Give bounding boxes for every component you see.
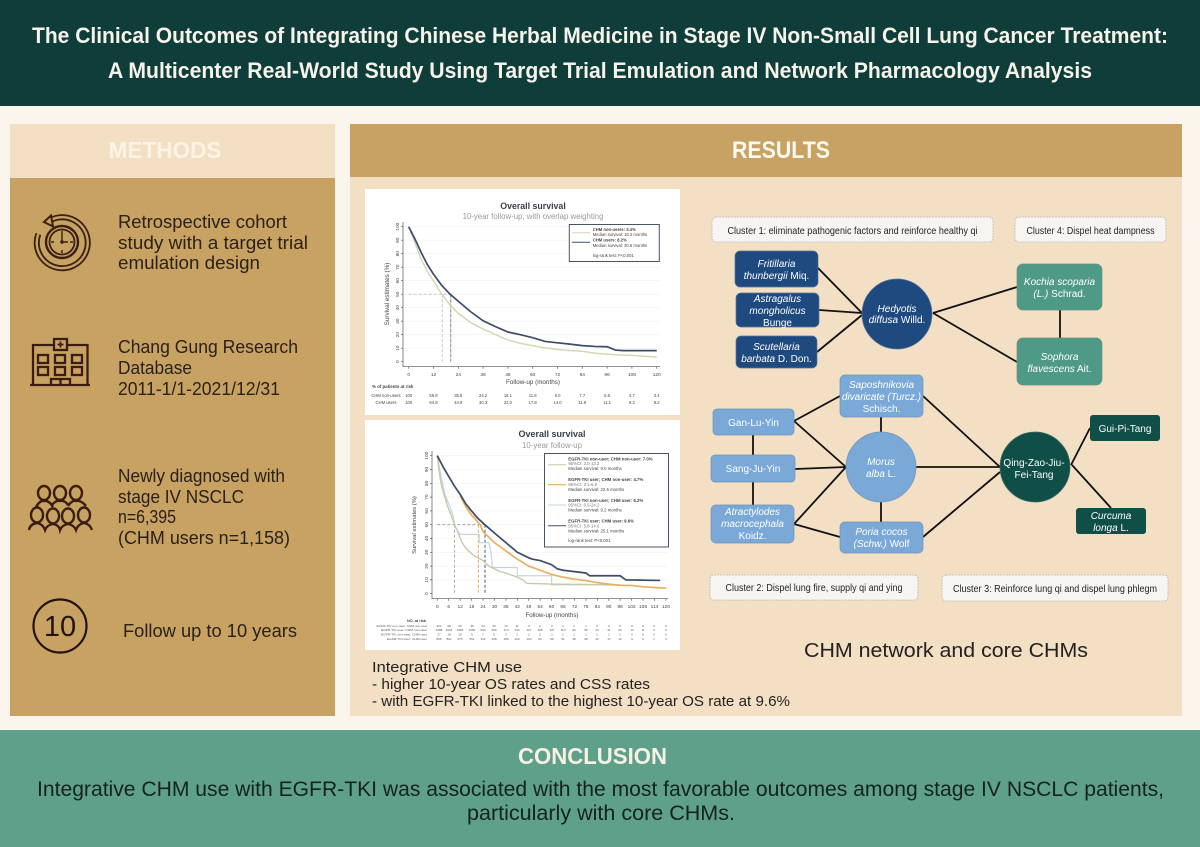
node: Fritillaria: Fritillaria (758, 259, 796, 270)
node: Atractylodes (711, 505, 794, 543)
label: cluster 3: Cluster 3: Reinforce lung qi and dispel lung phlegm (953, 583, 1157, 595)
chart: overall survival with overlap weighting: 3.4 (654, 393, 660, 398)
chart: overall survival by EGFR-TKI and CHM use: 1 (562, 624, 564, 628)
node: Astragalus: mongholicus (749, 306, 806, 317)
chart: overall survival by EGFR-TKI and CHM use: 95%CI: 3.1-6.9 (568, 482, 598, 487)
chart: overall survival by EGFR-TKI and CHM use: 2288 (436, 628, 443, 632)
chart: overall survival by EGFR-TKI and CHM use: 13 (504, 624, 508, 628)
chart: overall survival with overlap weighting: 10-year follow-up, with overlap weighting (463, 212, 603, 221)
chart: overall survival by EGFR-TKI and CHM use: 58 (584, 628, 588, 632)
chart: overall survival with overlap weighting: 80 (395, 251, 401, 256)
text: conclusion statement: particularly with core CHMs. (467, 801, 735, 825)
chart: overall survival by EGFR-TKI and CHM use: 0 (631, 624, 633, 628)
node: Sophora flavescens: flavescens Ait. (1028, 364, 1091, 375)
chart: overall survival by EGFR-TKI and CHM use: 18 (469, 604, 475, 610)
chart: overall survival by EGFR-TKI and CHM use: 0 (665, 624, 667, 628)
chart: overall survival with overlap weighting: 20 (395, 332, 401, 337)
caption: CHM network: CHM network and core CHMs (804, 639, 1088, 662)
chart: overall survival by EGFR-TKI and CHM use: 98 (447, 624, 451, 628)
title banner (0, 0, 1200, 106)
chart: overall survival by EGFR-TKI and CHM use: 10 (424, 577, 430, 583)
chart: overall survival by EGFR-TKI and CHM use: 669 (491, 628, 497, 632)
chart: overall survival by EGFR-TKI and CHM use: 2 (551, 632, 553, 636)
chart: overall survival by EGFR-TKI and CHM use: 95%CI: 0.5-24.2 (568, 502, 600, 508)
chart: overall survival by EGFR-TKI and CHM use: 1 (596, 632, 598, 636)
chart: overall survival by EGFR-TKI and CHM use: 0 (665, 632, 667, 636)
label: cluster 2: Cluster 2: Dispel lung fire, supply qi and ying (726, 582, 903, 594)
chart: overall survival by EGFR-TKI and CHM use: Follow-up (months) (526, 612, 578, 619)
heading: methods: METHODS (108, 137, 222, 163)
label: cluster 3 (942, 575, 1168, 601)
chart: overall survival by EGFR-TKI and CHM use: 95%CI: 5.8-14.6 (568, 524, 600, 528)
chart: overall survival by EGFR-TKI and CHM use: 51 (561, 637, 565, 641)
chart: overall survival by EGFR-TKI and CHM use: EGFR-TKI user; CHM user: 9.6% (568, 518, 634, 524)
chart: overall survival with overlap weighting: 12 (431, 372, 436, 378)
chart: overall survival by EGFR-TKI and CHM use: 6 (447, 604, 450, 610)
node: Sang-Ju-Yin (711, 455, 795, 482)
chart: overall survival by EGFR-TKI and CHM use: 110 (561, 628, 566, 632)
chart: overall survival with overlap weighting: 100 (405, 393, 413, 398)
chart: overall survival by EGFR-TKI and CHM use: 2 (539, 624, 541, 628)
chart: overall survival by EGFR-TKI and CHM use: 0 (653, 624, 655, 628)
chart: overall survival by EGFR-TKI and CHM use: 36 (503, 604, 509, 610)
chart: overall survival with overlap weighting: 48 (505, 372, 511, 378)
chart: overall survival with overlap weighting: 9.0 (555, 393, 561, 398)
chart: overall survival by EGFR-TKI and CHM use: 54 (538, 604, 543, 610)
text: database (118, 336, 298, 399)
chart: overall survival with overlap weighting: 11.1 (603, 400, 612, 405)
label: cluster 2 (710, 575, 918, 600)
chart: overall survival with overlap weighting: 84 (580, 372, 585, 378)
node: Morus alba (846, 432, 916, 502)
chart: overall survival with overlap weighting: 64.8 (429, 400, 438, 405)
chart: overall survival with overlap weighting (365, 189, 680, 415)
node: Saposhnikovia: Saposhnikovia (849, 380, 914, 391)
chart: overall survival by EGFR-TKI and CHM use: 188 (503, 637, 509, 641)
chart: overall survival with overlap weighting: 60 (395, 278, 401, 283)
title banner: The Clinical Outcomes of Integrating Chinese Herbal Medicine in Stage IV Non-Small Cell Lung Cancer Treatment: (32, 23, 1168, 48)
chart: overall survival by EGFR-TKI and CHM use: 60 (549, 604, 555, 610)
diagram: CHM network (710, 217, 1168, 601)
chart: overall survival with overlap weighting: 36 (480, 372, 486, 378)
chart: overall survival by EGFR-TKI and CHM use: 930 (480, 628, 486, 632)
chart: overall survival by EGFR-TKI and CHM use: EGFR-TKI non-user; CHM user (381, 632, 427, 636)
node: Scutellaria (736, 336, 817, 368)
chart: overall survival by EGFR-TKI and CHM use: 342 (480, 637, 486, 641)
chart: overall survival with overlap weighting: 72 (555, 372, 560, 378)
chart: overall survival by EGFR-TKI and CHM use: 2 (539, 632, 541, 636)
node: Poria cocos (840, 522, 923, 553)
chart: overall survival with overlap weighting: 22.0 (504, 400, 513, 405)
chart: overall survival by EGFR-TKI and CHM use: 100 (424, 451, 430, 460)
chart: overall survival with overlap weighting: 17.8 (529, 400, 537, 405)
chart: overall survival with overlap weighting: 90 (395, 237, 401, 243)
chart: overall survival by EGFR-TKI and CHM use: 238 (491, 637, 497, 641)
heading: conclusion: CONCLUSION (518, 743, 667, 769)
node: Astragalus: Astragalus (753, 294, 801, 305)
chart: overall survival by EGFR-TKI and CHM use: 84 (595, 604, 600, 610)
chart: overall survival by EGFR-TKI and CHM use: 1 (573, 624, 575, 628)
heading: results: RESULTS (732, 137, 830, 164)
chart: overall survival with overlap weighting: 100 (395, 222, 401, 231)
chart: overall survival with overlap weighting: 108 (628, 372, 636, 378)
node: Saposhnikovia: divaricate (Turcz.) (842, 392, 921, 403)
chart: overall survival with overlap weighting: 16.1 (504, 393, 513, 398)
icon: group of people (29, 486, 92, 530)
chart: overall survival by EGFR-TKI and CHM use: 44 (595, 628, 599, 632)
chart: overall survival by EGFR-TKI and CHM use: 20 (424, 563, 430, 569)
text: study design: study with a target trial (118, 232, 308, 253)
icon: hospital (30, 339, 90, 385)
chart: overall survival by EGFR-TKI and CHM use: 41 (607, 628, 611, 632)
label: cluster 1: Cluster 1: eliminate pathogenic factors and reinforce healthy qi (728, 225, 978, 237)
text: integrative CHM findings: - with EGFR-TKI linked to the highest 10-year OS rate at 9.6% (372, 694, 790, 710)
chart: overall survival by EGFR-TKI and CHM use: 0 (665, 637, 667, 641)
node: Scutellaria: Scutellaria (753, 342, 800, 353)
chart: overall survival by EGFR-TKI and CHM use: 40 (424, 536, 430, 541)
chart: overall survival by EGFR-TKI and CHM use: Median survival: 22.6 months (568, 487, 624, 492)
chart: overall survival by EGFR-TKI and CHM use: 0 (631, 632, 633, 636)
chart: overall survival by EGFR-TKI and CHM use (365, 420, 680, 650)
chart: overall survival by EGFR-TKI and CHM use: 60 (458, 624, 462, 628)
chart: overall survival by EGFR-TKI and CHM use: 27 (437, 632, 441, 636)
chart: overall survival by EGFR-TKI and CHM use: 2 (528, 632, 530, 636)
chart: overall survival with overlap weighting: 24 (456, 372, 461, 378)
chart: overall survival by EGFR-TKI and CHM use: 137 (549, 628, 555, 632)
chart: overall survival with overlap weighting: 35.8 (454, 393, 463, 398)
node: Hedyotis diffusa (862, 279, 932, 349)
chart: overall survival by EGFR-TKI and CHM use: Overall survival (518, 429, 586, 439)
text: database: 2011-1/1-2021/12/31 (118, 378, 280, 399)
node: Poria cocos: Poria cocos (855, 527, 908, 538)
text: integrative CHM findings: Integrative CHM use (372, 660, 522, 676)
text: follow up: Follow up to 10 years (123, 620, 297, 641)
chart: overall survival with overlap weighting: 10 (395, 345, 401, 351)
chart: overall survival by EGFR-TKI and CHM use: 13 (630, 628, 634, 632)
node: Poria cocos: (Schw.) Wolf (854, 539, 910, 550)
chart: overall survival by EGFR-TKI and CHM use: EGFR-TKI user; CHM non-user: 4.7% (568, 477, 643, 482)
chart: overall survival by EGFR-TKI and CHM use: 12 (618, 637, 622, 641)
chart: overall survival with overlap weighting: 44.8 (454, 400, 463, 405)
chart: overall survival by EGFR-TKI and CHM use: NO. at risk (407, 619, 427, 623)
chart: overall survival with overlap weighting: 5.6 (604, 393, 611, 398)
chart: overall survival by EGFR-TKI and CHM use: 70 (424, 494, 430, 500)
chart: overall survival by EGFR-TKI and CHM use: 1 (562, 632, 564, 636)
chart: overall survival by EGFR-TKI and CHM use: 90 (606, 604, 612, 610)
chart: overall survival by EGFR-TKI and CHM use: 90 (424, 467, 430, 472)
chart: overall survival with overlap weighting: log-rank test: P<0.001 (593, 253, 634, 258)
chart: overall survival with overlap weighting: 24.2 (479, 393, 488, 398)
chart: overall survival by EGFR-TKI and CHM use: 95%CI: 3.0-13.2 (568, 461, 600, 466)
chart: overall survival by EGFR-TKI and CHM use: Survival estimates (%) (412, 496, 418, 554)
chart: overall survival by EGFR-TKI and CHM use: 2 (551, 624, 553, 628)
chart: overall survival by EGFR-TKI and CHM use: EGFR-TKI user; CHM non-user (381, 628, 427, 632)
chart: overall survival by EGFR-TKI and CHM use: 188 (537, 628, 543, 632)
chart: overall survival by EGFR-TKI and CHM use: 20 (595, 637, 599, 641)
chart: overall survival by EGFR-TKI and CHM use: 3 (528, 624, 530, 628)
chart: overall survival by EGFR-TKI and CHM use: 0 (642, 632, 644, 636)
text: population: n=6,395 (118, 506, 176, 527)
chart: overall survival with overlap weighting: 0 (407, 372, 410, 378)
chart: overall survival with overlap weighting: Overall survival (500, 201, 566, 211)
chart: overall survival by EGFR-TKI and CHM use: 344 (514, 628, 520, 632)
chart: overall survival by EGFR-TKI and CHM use: 72 (572, 604, 577, 610)
node: Sophora flavescens: Sophora (1041, 352, 1079, 363)
node: Fritillaria: thunbergii Miq. (744, 271, 809, 282)
chart: overall survival with overlap weighting: 59.8 (429, 393, 438, 398)
chart: overall survival by EGFR-TKI and CHM use: 675 (457, 637, 463, 641)
chart: overall survival by EGFR-TKI and CHM use: 35 (470, 624, 474, 628)
chart: overall survival by EGFR-TKI and CHM use: 11 (641, 628, 645, 632)
chart: overall survival by EGFR-TKI and CHM use: 1282 (469, 628, 476, 632)
chart: overall survival by EGFR-TKI and CHM use: 1666 (457, 628, 464, 632)
chart: overall survival with overlap weighting: CHM non-users (371, 393, 401, 398)
node: Gui-Pi-Tang: Gui-Pi-Tang (1099, 424, 1151, 435)
panel: results (350, 124, 1182, 716)
chart: overall survival by EGFR-TKI and CHM use: 1 (653, 637, 655, 641)
chart: overall survival by EGFR-TKI and CHM use: 1 (619, 632, 621, 636)
chart: overall survival by EGFR-TKI and CHM use: 17 (607, 637, 611, 641)
chart: overall survival by EGFR-TKI and CHM use: 66 (560, 604, 566, 610)
node: Morus alba: alba L. (866, 469, 896, 480)
icon: number ten in circle: 10 (44, 611, 76, 643)
chart: overall survival with overlap weighting: 96 (604, 372, 610, 378)
node: Qing-Zao-Jiu-Fei-Tang: Fei-Tang (1015, 470, 1053, 481)
chart: overall survival by EGFR-TKI and CHM use: 6 (642, 637, 644, 641)
node: Kochia scoparia (1017, 264, 1102, 310)
text: study design: emulation design (118, 252, 260, 273)
node: Saposhnikovia (840, 375, 923, 417)
chart: overall survival with overlap weighting: 11.8 (529, 393, 537, 398)
node: Curcuma longa (1076, 508, 1146, 534)
chart: overall survival with overlap weighting: % of patients at risk (372, 384, 414, 389)
chart: overall survival by EGFR-TKI and CHM use: 96 (618, 604, 623, 610)
node: Atractylodes: Koidz. (739, 531, 766, 542)
chart: overall survival by EGFR-TKI and CHM use: 78 (583, 604, 589, 610)
chart: overall survival by EGFR-TKI and CHM use: 18 (447, 632, 451, 636)
text: database: Database (118, 357, 192, 378)
chart: overall survival by EGFR-TKI and CHM use: 9 (631, 637, 633, 641)
chart: overall survival by EGFR-TKI and CHM use: EGFR-TKI non-user; CHM non-user: 7.0% (568, 456, 653, 462)
chart: overall survival by EGFR-TKI and CHM use: 7 (482, 632, 484, 636)
panel: methods (10, 124, 335, 716)
chart: overall survival by EGFR-TKI and CHM use: 24 (480, 604, 486, 610)
chart: overall survival by EGFR-TKI and CHM use: 474 (503, 628, 509, 632)
chart: overall survival by EGFR-TKI and CHM use: 0 (642, 624, 644, 628)
chart: overall survival by EGFR-TKI and CHM use: 1 (573, 632, 575, 636)
chart: overall survival by EGFR-TKI and CHM use: 2024 (446, 628, 453, 632)
node: Hedyotis diffusa: diffusa Willd. (869, 315, 925, 326)
chart: overall survival by EGFR-TKI and CHM use: 0 (424, 592, 430, 595)
chart: overall survival by EGFR-TKI and CHM use: 20 (618, 628, 622, 632)
text: integrative CHM findings (372, 660, 790, 710)
chart: overall survival by EGFR-TKI and CHM use: 0 (608, 624, 610, 628)
chart: overall survival with overlap weighting: 11.9 (578, 400, 587, 405)
chart: overall survival by EGFR-TKI and CHM use: 84 (538, 637, 542, 641)
chart: overall survival by EGFR-TKI and CHM use: 60 (424, 508, 430, 514)
chart: overall survival by EGFR-TKI and CHM use: 5 (493, 632, 495, 636)
chart: overall survival with overlap weighting: 50 (395, 291, 401, 297)
chart: overall survival with overlap weighting: Median survival: 16.2 months (593, 232, 647, 237)
chart: overall survival by EGFR-TKI and CHM use: 3 (505, 632, 507, 636)
chart: overall survival with overlap weighting: 40 (395, 305, 401, 310)
text: population: (CHM users n=1,158) (118, 527, 290, 548)
text: population (118, 465, 290, 548)
chart: overall survival by EGFR-TKI and CHM use: EGFR-TKI non-user; CHM non-user (376, 624, 428, 628)
chart: overall survival with overlap weighting: Median survival: 20.6 months (593, 243, 647, 248)
chart: overall survival by EGFR-TKI and CHM use: 3 (516, 632, 518, 636)
chart: overall survival by EGFR-TKI and CHM use: 30 (424, 549, 430, 555)
node: Sang-Ju-Yin: Sang-Ju-Yin (726, 464, 780, 475)
chart: overall survival by EGFR-TKI and CHM use: 38 (572, 637, 576, 641)
text: integrative CHM findings: - higher 10-year OS rates and CSS rates (372, 677, 650, 693)
chart: overall survival by EGFR-TKI and CHM use: 1 (608, 632, 610, 636)
node: Hedyotis diffusa: Hedyotis (878, 304, 916, 315)
chart: overall survival by EGFR-TKI and CHM use: 30 (492, 604, 497, 610)
chart: overall survival by EGFR-TKI and CHM use: 801 (446, 637, 452, 641)
node: Gan-Lu-Yin: Gan-Lu-Yin (728, 418, 779, 429)
chart: overall survival with overlap weighting: 70 (395, 264, 401, 270)
chart: overall survival by EGFR-TKI and CHM use: 0 (619, 624, 621, 628)
chart: overall survival by EGFR-TKI and CHM use: 28 (584, 637, 588, 641)
chart: overall survival by EGFR-TKI and CHM use: 3 (653, 628, 655, 632)
chart: overall survival by EGFR-TKI and CHM use: 551 (469, 637, 475, 641)
label: cluster 1 (712, 217, 993, 242)
chart: overall survival by EGFR-TKI and CHM use: 1 (585, 632, 587, 636)
chart: overall survival by EGFR-TKI and CHM use: 10 (458, 632, 462, 636)
chart: overall survival with overlap weighting: 30.3 (479, 400, 488, 405)
node: Sophora flavescens (1017, 338, 1102, 385)
text: population: stage IV NSCLC (118, 486, 244, 507)
chart: overall survival with overlap weighting: Survival estimates (%) (384, 263, 391, 325)
label: cluster 4: Cluster 4: Dispel heat dampness (1026, 225, 1154, 237)
title banner: A Multicenter Real-World Study Using Target Trial Emulation and Network Pharmacology Analysis (108, 58, 1092, 83)
chart: overall survival by EGFR-TKI and CHM use: 1 (585, 624, 587, 628)
chart: overall survival by EGFR-TKI and CHM use: 0 (436, 604, 439, 610)
chart: overall survival by EGFR-TKI and CHM use: 48 (526, 604, 532, 610)
chart: overall survival by EGFR-TKI and CHM use: 251 (436, 624, 442, 628)
chart: overall survival with overlap weighting: 60 (530, 372, 536, 378)
chart: overall survival by EGFR-TKI and CHM use: 120 (662, 604, 670, 610)
node: Gui-Pi-Tang (1090, 415, 1160, 441)
text: database: Chang Gung Research (118, 336, 298, 357)
chart: overall survival by EGFR-TKI and CHM use: 896 (436, 637, 442, 641)
chart: overall survival with overlap weighting: 8.2 (629, 400, 635, 405)
chart: overall survival with overlap weighting: CHM users (376, 400, 396, 405)
chart: overall survival with overlap weighting: 0 (395, 360, 401, 363)
chart: overall survival with overlap weighting: 14.0 (553, 400, 562, 405)
node: Atractylodes: macrocephala (721, 519, 784, 530)
chart: overall survival by EGFR-TKI and CHM use: 83 (572, 628, 576, 632)
chart: overall survival by EGFR-TKI and CHM use: Median survival: 9.2 months (568, 508, 622, 512)
node: Saposhnikovia: Schisch. (863, 404, 900, 415)
chart: overall survival by EGFR-TKI and CHM use: 0 (596, 624, 598, 628)
node: Morus alba: Morus (867, 457, 895, 468)
node: Kochia scoparia: Kochia scoparia (1024, 277, 1096, 288)
chart: overall survival by EGFR-TKI and CHM use: 12 (458, 604, 463, 610)
node: Scutellaria: barbata D. Don. (741, 354, 812, 365)
chart: overall survival by EGFR-TKI and CHM use: 133 (514, 637, 520, 641)
chart: overall survival with overlap weighting: 30 (395, 318, 401, 324)
chart: overall survival by EGFR-TKI and CHM use: 42 (515, 604, 520, 610)
chart: overall survival by EGFR-TKI and CHM use: 0 (665, 628, 667, 632)
text: conclusion statement (37, 777, 1164, 825)
icon: clock with circular arrow (37, 216, 88, 268)
node: Kochia scoparia: (L.) Schrad. (1033, 289, 1086, 300)
node: Qing-Zao-Jiu-Fei-Tang (1000, 432, 1070, 502)
chart: overall survival by EGFR-TKI and CHM use: Median survival: 25.1 months (568, 528, 624, 534)
chart: overall survival by EGFR-TKI and CHM use: 267 (526, 628, 532, 632)
chart: overall survival by EGFR-TKI and CHM use: 80 (424, 480, 430, 486)
chart: overall survival by EGFR-TKI and CHM use: 11 (515, 624, 519, 628)
node: Qing-Zao-Jiu-Fei-Tang: Qing-Zao-Jiu- (1003, 458, 1065, 469)
chart: overall survival with overlap weighting: CHM users: 8.2% (593, 238, 627, 242)
chart: overall survival with overlap weighting: 4.7 (629, 393, 635, 398)
chart: overall survival by EGFR-TKI and CHM use: 24 (481, 624, 485, 628)
chart: overall survival by EGFR-TKI and CHM use: EGFR-TKI user; CHM user (387, 637, 427, 641)
chart: overall survival by EGFR-TKI and CHM use: 50 (424, 522, 430, 527)
chart: overall survival with overlap weighting: Follow-up (months) (506, 379, 560, 386)
chart: overall survival by EGFR-TKI and CHM use: 103 (526, 637, 532, 641)
chart: overall survival by EGFR-TKI and CHM use: 102 (628, 604, 636, 610)
node: Astragalus: Bunge (763, 318, 792, 329)
chart: overall survival by EGFR-TKI and CHM use: 108 (639, 604, 647, 610)
icon: number ten in circle (34, 600, 86, 652)
chart: overall survival by EGFR-TKI and CHM use: log-rank test: P<0.001 (568, 538, 611, 543)
chart: overall survival by EGFR-TKI and CHM use: 20 (492, 624, 496, 628)
node: Atractylodes: Atractylodes (724, 507, 780, 518)
text: population: Newly diagnosed with (118, 465, 285, 486)
chart: overall survival by EGFR-TKI and CHM use: 10-year follow-up (522, 441, 583, 450)
chart: overall survival with overlap weighting: 8.2 (654, 400, 660, 405)
chart: overall survival with overlap weighting: 120 (653, 372, 661, 378)
node: Curcuma longa: Curcuma (1091, 511, 1132, 522)
chart: overall survival by EGFR-TKI and CHM use: 0 (653, 632, 655, 636)
node: Gan-Lu-Yin (713, 409, 794, 435)
chart: overall survival by EGFR-TKI and CHM use: 59 (550, 637, 554, 641)
chart: overall survival with overlap weighting: 100 (405, 400, 413, 405)
chart: overall survival by EGFR-TKI and CHM use: EGFR-TKI non-user; CHM user: 6.2% (568, 498, 643, 503)
node: Astragalus (736, 293, 819, 329)
panel: conclusion (0, 730, 1200, 847)
chart: overall survival by EGFR-TKI and CHM use: Median survival: 9.0 months (568, 466, 622, 471)
text: conclusion statement: Integrative CHM use with EGFR-TKI was associated with the most favorable outcomes among stage IV NSCLC patients, (37, 777, 1164, 801)
chart: overall survival with overlap weighting: 7.7 (579, 393, 586, 398)
label: cluster 4 (1015, 217, 1166, 242)
chart: overall survival by EGFR-TKI and CHM use: 114 (651, 604, 659, 610)
node: Fritillaria (735, 251, 818, 287)
node: Curcuma longa: longa L. (1093, 523, 1129, 534)
text: study design: Retrospective cohort (118, 211, 287, 232)
text: study design (118, 211, 308, 273)
chart: overall survival by EGFR-TKI and CHM use: 9 (471, 632, 473, 636)
chart: overall survival with overlap weighting: CHM non-users: 3.4% (593, 227, 636, 232)
